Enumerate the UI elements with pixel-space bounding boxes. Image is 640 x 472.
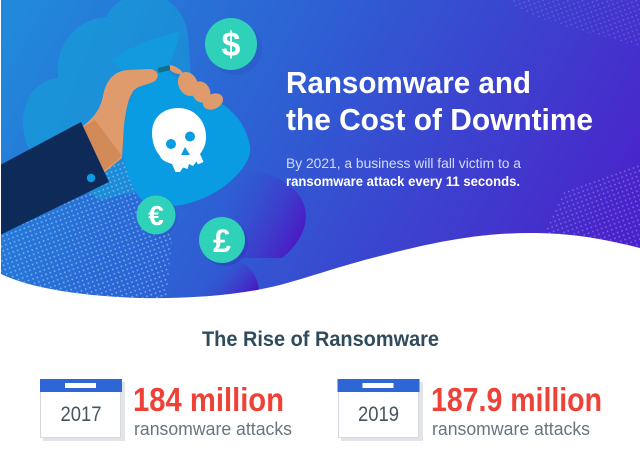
title: the Cost of Downtime [286,102,593,137]
subtitle: By 2021, a business will fall victim to a [286,156,521,171]
dot pattern: lower right [546,166,640,246]
money bag [123,69,250,207]
heading: the rise of ransomware: The Rise of Ransomware [202,328,439,351]
coin: pound [199,217,248,266]
dot pattern: lower left [0,160,172,300]
subtitle: ransomware attack every 11 seconds. [286,174,520,189]
dot pattern: top right [512,0,640,48]
title: Ransomware and [286,65,531,100]
stat: 2019 [338,379,602,441]
label ransomware attacks: ransomware attacks [134,419,292,439]
calendar icon 2019: 2019 [358,403,399,426]
calendar icon 2017 [40,379,125,441]
subtitle [286,156,521,189]
label ransomware attacks: ransomware attacks [432,419,590,439]
calendar icon 2019 [338,379,423,441]
calendar icon 2017: 2017 [60,403,102,426]
money bag flap [112,31,180,72]
hero banner [0,0,640,300]
coin: euro [136,196,178,236]
purple blob: bottom [204,263,259,296]
value 184 million: 184 million [133,381,284,418]
stat: 2017 [40,379,292,441]
coin: euro: € [148,200,164,231]
skull icon [152,108,206,172]
coin: dollar [205,18,262,75]
sleeve [0,122,109,235]
title [286,65,593,137]
cufflink [87,174,95,182]
hand [78,65,226,176]
background cloud blob [23,0,191,200]
purple blob: right [238,174,306,258]
coin: dollar: $ [222,26,241,64]
coin: pound: £ [213,223,231,259]
value 187.9 million: 187.9 million [431,381,602,418]
